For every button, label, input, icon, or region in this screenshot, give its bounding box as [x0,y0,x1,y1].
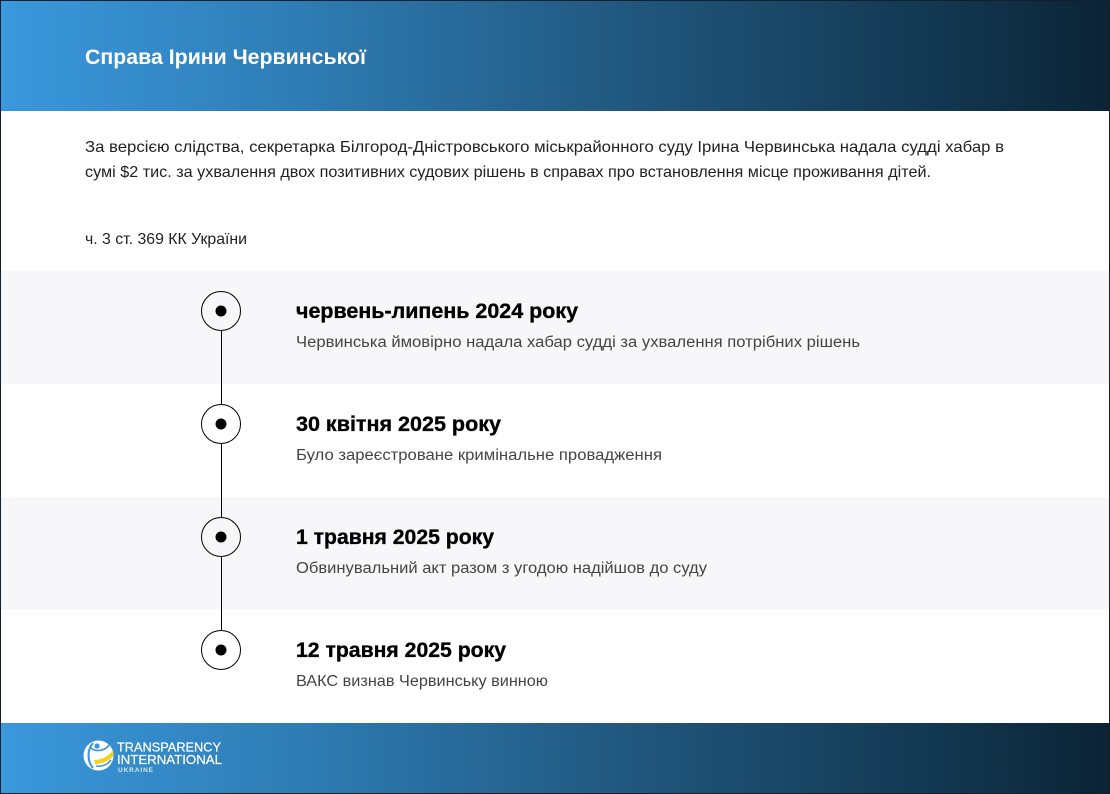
timeline panel [0,271,1110,690]
timeline event 2 [202,404,662,464]
timeline connector line [221,311,222,650]
description 1: Червинська ймовірно надала хабар судді за ухвалення потрібних рішень [296,334,860,351]
legal article reference: ч. 3 ст. 369 КК України [85,231,247,248]
description 4: ВАКС визнав Червинську винною [296,673,548,690]
logo wordmark: TRANSPARENCY [117,740,222,754]
timeline event 1 [202,292,860,351]
description 3: Обвинувальний акт разом з угодою надійшов до суду [296,560,707,577]
date 3: 1 травня 2025 року [296,525,494,549]
marker 3 [202,518,240,556]
logo: Transparency International Ukraine: UKRAINE [118,767,154,774]
marker 1 [202,292,240,330]
timeline event 4 [202,630,548,690]
row backgrounds [0,271,1110,610]
logo emblem [84,740,114,770]
date 4: 12 травня 2025 року [296,638,506,662]
logo: Transparency International Ukraine [84,740,222,774]
header banner [0,0,1110,111]
intro text [85,139,1004,181]
title: Справа Ірини Червинської [85,46,367,69]
description 2: Було зареєстроване кримінальне провадження [296,447,662,464]
footer banner [0,723,1110,794]
date 1: червень-липень 2024 року [296,299,578,323]
marker 4 [202,630,240,670]
intro text: За версією слідства, секретарка Білгород-Дністровського міськрайонного суду Ірина Червинська надала судді хабар в [85,139,1004,156]
marker 2 [202,404,240,444]
timeline event 3 [202,518,707,577]
logo: Transparency International Ukraine: INTERNATIONAL [117,753,222,767]
date 2: 30 квітня 2025 року [296,412,501,436]
intro text: сумі $2 тис. за ухвалення двох позитивних судових рішень в справах про встановлення місце проживання дітей. [85,164,931,181]
